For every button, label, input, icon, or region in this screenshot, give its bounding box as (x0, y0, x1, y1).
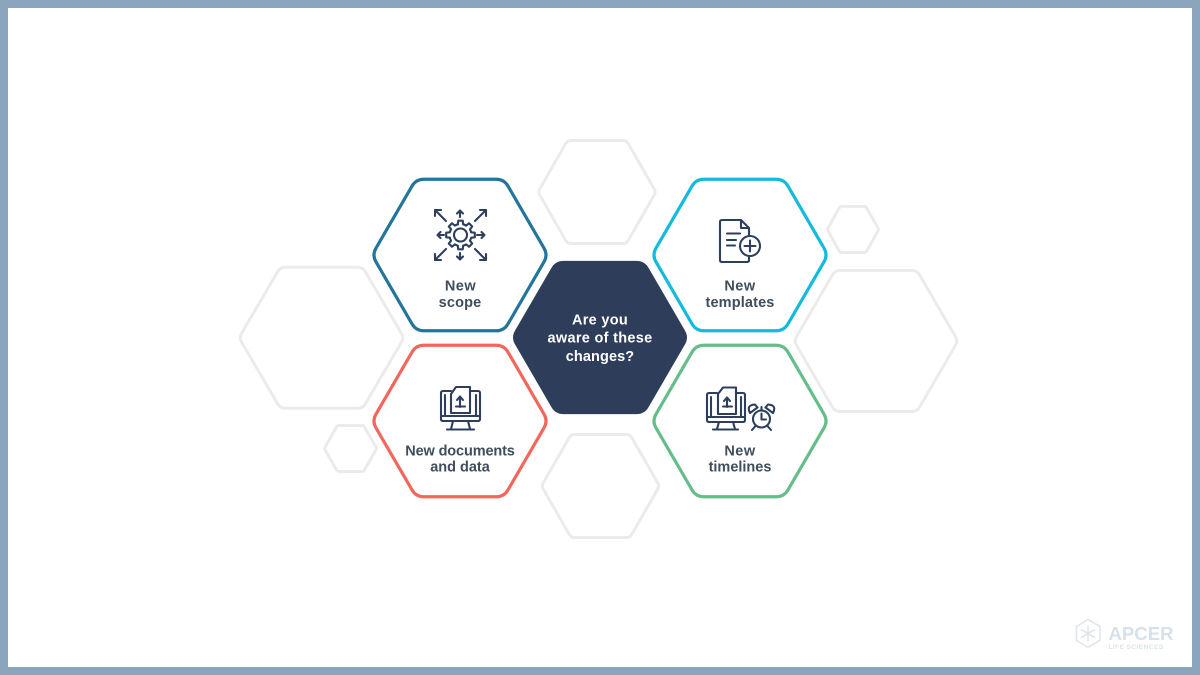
panel: central question: aware of these (548, 330, 652, 346)
logo: APCER Life Sciences (1076, 620, 1174, 651)
icon: monitor with document and alarm clock (707, 388, 774, 430)
icon: document with plus (720, 220, 760, 262)
heading: Are you (572, 312, 628, 328)
panel: new templates (654, 179, 826, 331)
panel: new documents and data: and data (430, 460, 491, 476)
panel: new documents and data (374, 345, 546, 497)
panel: new scope (374, 179, 546, 331)
logo: APCER Life Sciences: APCER (1108, 623, 1174, 644)
panel: new timelines (654, 345, 826, 497)
background hexagons (240, 140, 957, 538)
label: New (724, 444, 756, 460)
panel: new scope: scope (439, 295, 481, 311)
panel: central question: changes? (566, 349, 634, 365)
label: New (724, 278, 756, 294)
panel: new timelines: timelines (709, 460, 771, 476)
label: New documents (405, 444, 515, 460)
panel: new templates: templates (705, 295, 775, 311)
label: New (445, 278, 476, 294)
logo: APCER Life Sciences: LIFE SCIENCES (1108, 644, 1164, 651)
panel: central question (513, 261, 687, 414)
icon: gear with outward arrows (435, 210, 486, 260)
icon: monitor with document upload (441, 387, 480, 430)
